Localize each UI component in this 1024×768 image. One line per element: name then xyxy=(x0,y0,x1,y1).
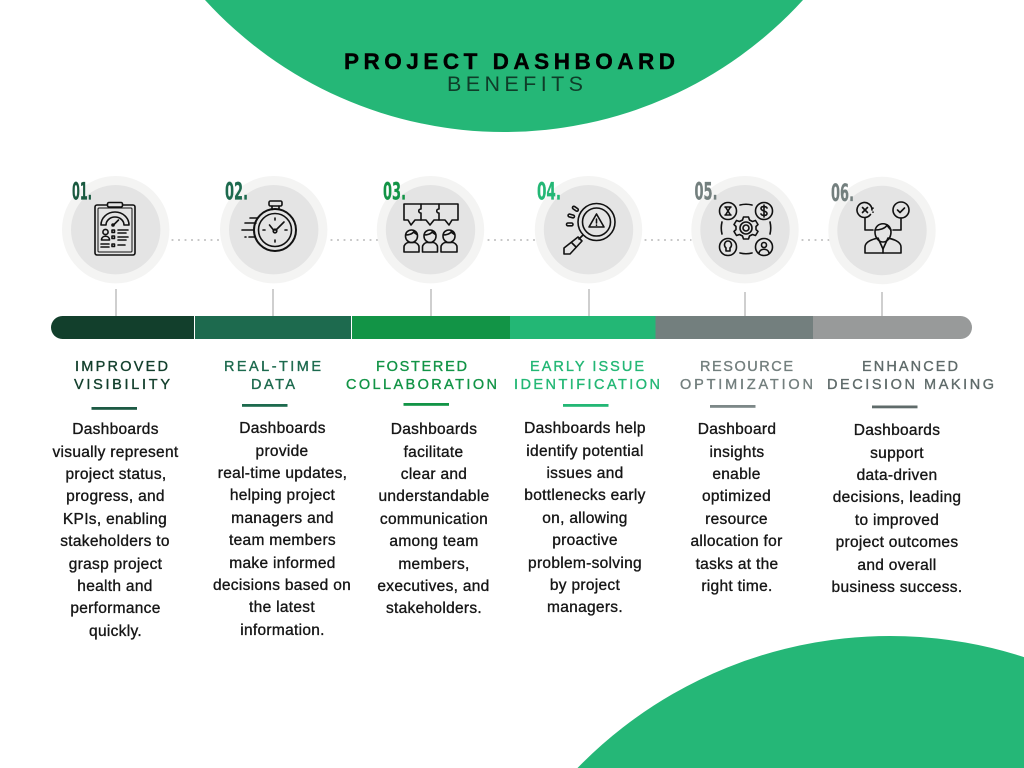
heading: VISIBILITY xyxy=(74,377,170,393)
description: grasp project xyxy=(69,556,163,573)
description: allocation for xyxy=(690,533,783,550)
description: Dashboards xyxy=(391,421,477,438)
description: KPIs, enabling xyxy=(63,511,167,528)
description: proactive xyxy=(552,532,618,549)
description: provide xyxy=(256,443,308,460)
step number: 03. xyxy=(383,178,406,206)
description: Dashboards xyxy=(239,420,326,437)
description: resource xyxy=(705,511,768,528)
heading xyxy=(680,359,813,393)
heading: RESOURCE xyxy=(700,359,793,375)
description: optimized xyxy=(702,488,771,505)
description xyxy=(690,421,783,595)
description: helping project xyxy=(230,487,336,504)
description: to improved xyxy=(855,512,939,529)
description: managers. xyxy=(547,599,623,616)
description: real-time updates, xyxy=(218,465,347,482)
description xyxy=(377,421,490,617)
heading: EARLY ISSUE xyxy=(530,359,644,375)
description xyxy=(524,420,646,616)
description: information. xyxy=(240,622,325,639)
description: project outcomes xyxy=(836,534,958,551)
description: among team xyxy=(389,533,479,550)
description xyxy=(213,420,351,639)
heading xyxy=(827,359,994,393)
step number: 05. xyxy=(694,178,718,206)
green semicircle: bottom right xyxy=(578,636,1024,768)
description: Dashboards xyxy=(854,422,940,439)
heading: IMPROVED xyxy=(75,359,168,375)
description: quickly. xyxy=(89,623,142,640)
heading xyxy=(514,359,660,393)
heading: REAL-TIME xyxy=(224,359,321,375)
description: problem-solving xyxy=(528,555,642,572)
description: team members xyxy=(229,532,336,549)
panel: 05 resource optimization xyxy=(680,176,813,595)
description: health and xyxy=(77,578,153,595)
icon: magnifier with warning xyxy=(564,204,615,254)
description: bottlenecks early xyxy=(524,487,646,504)
heading: COLLABORATION xyxy=(346,377,497,393)
step number: 02. xyxy=(225,178,248,206)
underline xyxy=(242,404,288,407)
title xyxy=(344,49,675,96)
heading xyxy=(224,359,321,393)
description: support xyxy=(870,445,924,462)
heading: IDENTIFICATION xyxy=(514,377,660,393)
description: decisions based on xyxy=(213,577,351,594)
description: executives, and xyxy=(377,578,490,595)
description: progress, and xyxy=(66,488,165,505)
description: Dashboards xyxy=(72,421,159,438)
description: project status, xyxy=(66,466,166,483)
title: BENEFITS xyxy=(447,72,583,96)
description: on, allowing xyxy=(542,510,628,527)
underline xyxy=(404,403,449,406)
description: stakeholders. xyxy=(386,600,482,617)
panel: 02 real-time data xyxy=(213,176,351,639)
green semicircle: top xyxy=(205,0,803,132)
description: clear and xyxy=(401,466,467,483)
heading xyxy=(346,359,497,393)
description: by project xyxy=(550,577,620,594)
description: and overall xyxy=(857,557,937,574)
panel: 04 early issue identification xyxy=(514,176,660,616)
description: tasks at the xyxy=(696,556,778,573)
underline xyxy=(710,405,756,408)
icon: clipboard with gauge xyxy=(95,202,135,255)
panel: 01 improved visibility xyxy=(52,176,179,640)
icon: gear with resources xyxy=(720,202,772,256)
description: communication xyxy=(380,511,488,528)
segmented timeline bar xyxy=(51,316,972,339)
description: visually represent xyxy=(52,444,179,461)
description: stakeholders to xyxy=(60,533,170,550)
description: right time. xyxy=(701,578,773,595)
underline xyxy=(92,407,137,410)
description: performance xyxy=(70,600,161,617)
description xyxy=(832,422,962,596)
step number: 06. xyxy=(831,179,854,207)
description: members, xyxy=(398,556,470,573)
description: insights xyxy=(710,444,764,461)
description: issues and xyxy=(546,465,624,482)
panel: 06 enhanced decision making xyxy=(827,177,994,596)
description: understandable xyxy=(378,488,490,505)
description: business success. xyxy=(832,579,962,596)
icon: decision maker xyxy=(857,202,909,253)
panel: 03 fostered collaboration xyxy=(346,176,497,617)
description: decisions, leading xyxy=(833,489,961,506)
heading: DECISION MAKING xyxy=(827,377,994,393)
description: enable xyxy=(712,466,761,483)
heading xyxy=(74,359,170,393)
description: managers and xyxy=(231,510,334,527)
title: PROJECT DASHBOARD xyxy=(344,49,675,74)
step number: 04. xyxy=(537,178,561,206)
underline xyxy=(872,406,918,408)
heading: DATA xyxy=(251,377,295,393)
description: identify potential xyxy=(526,443,644,460)
underline xyxy=(563,404,608,407)
heading: OPTIMIZATION xyxy=(680,377,813,393)
description: make informed xyxy=(229,555,336,572)
icon: puzzle speech bubbles and team xyxy=(404,204,458,252)
description: Dashboard xyxy=(698,421,776,438)
description: data-driven xyxy=(857,467,937,484)
description: facilitate xyxy=(404,444,463,461)
icon: stopwatch xyxy=(242,201,296,251)
heading: FOSTERED xyxy=(376,359,467,375)
description: the latest xyxy=(249,599,315,616)
step number: 01. xyxy=(72,178,92,206)
description xyxy=(52,421,179,640)
description: Dashboards help xyxy=(524,420,646,437)
heading: ENHANCED xyxy=(862,359,958,375)
